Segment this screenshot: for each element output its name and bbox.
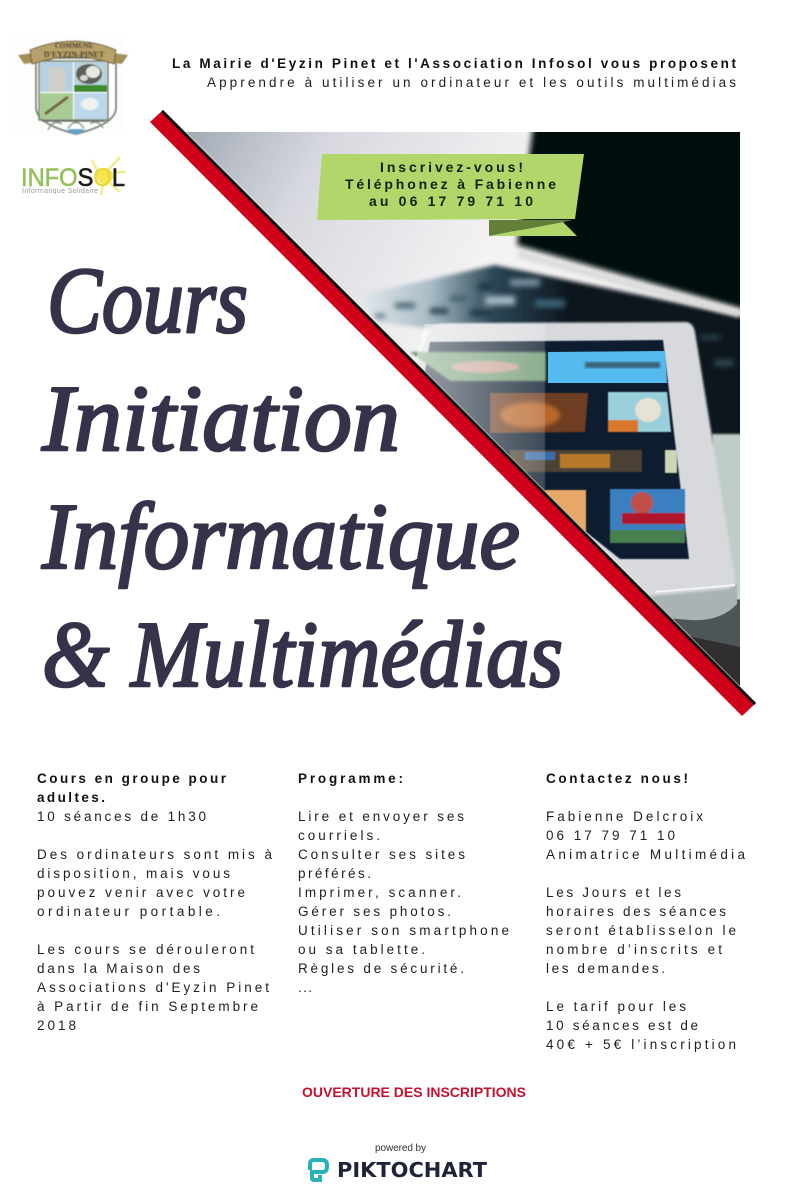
callout ribbon: Téléphonez à Fabienne [345,176,556,192]
column: cours [37,771,272,1033]
column: cours: disposition, mais vous [37,866,230,881]
laptop screen [512,132,740,312]
table [645,591,740,686]
tablet body underside [640,585,737,620]
column: contact: Contactez nous! [546,771,688,786]
title: & Multimédias [42,603,563,707]
column: programme: Consulter ses sites [298,847,465,862]
column: cours: Les cours se dérouleront [37,942,254,957]
column: cours: à Partir de fin Septembre [37,999,258,1014]
photo: laptop and tablet [186,120,770,695]
column: contact: Le tarif pour les [546,999,686,1014]
column: cours: Des ordinateurs sont mis à [37,847,272,862]
column: programme: Gérer ses photos. [298,904,451,919]
logo: commune d'Eyzin-Pinet crest [10,35,128,135]
piktochart branding: PIKTOCHART [337,1158,487,1182]
title [41,249,563,707]
header text: La Mairie d'Eyzin Pinet et l'Association Infosol vous proposent [172,56,736,71]
header text: Apprendre à utiliser un ordinateur et les outils multimédias [207,75,736,90]
laptop keyboard [355,265,770,445]
column: contact: les demandes. [546,961,665,976]
column: contact: 40€ + 5€ l’inscription [546,1037,736,1052]
column: contact: Les Jours et les [546,885,681,900]
column: programme: Imprimer, scanner. [298,885,461,900]
column: contact: horaires des séances [546,904,726,919]
keys [375,279,733,366]
title: Informatique [41,485,520,589]
column: cours: pouvez venir avec votre [37,885,245,900]
column: contact: 06 17 79 71 10 [546,828,675,843]
column: contact: nombre d’inscrits et [546,942,722,957]
tablet screen [420,340,689,559]
diagonal red band [150,110,756,716]
column: programme: préférés. [298,866,371,881]
column: programme: Utiliser son smartphone [298,923,509,938]
column: programme: Lire et envoyer ses [298,809,464,824]
column: programme: Programme: [298,771,403,786]
logo: commune d'Eyzin-Pinet crest: D'EYZIN-PINET [44,50,105,59]
registration notice: OUVERTURE DES INSCRIPTIONS [302,1084,526,1100]
column: programme: Règles de sécurité. [298,961,464,976]
column: contact: 10 séances est de [546,1018,698,1033]
title: Initiation [41,367,400,471]
column: cours: adultes. [37,790,105,805]
column: programme: ... [298,980,312,995]
callout ribbon: Inscrivez-vous! [380,159,523,175]
laptop body edge [518,254,740,314]
callout ribbon: au 06 17 79 71 10 [369,193,533,209]
logo: Infosol: Informatique Solidaire [22,188,98,195]
logo: commune d'Eyzin-Pinet crest: COMMUNE [55,42,94,50]
column: contact [546,771,745,1052]
column: cours: dans la Maison des [37,961,200,976]
column: contact: seront établisselon le [546,923,736,938]
column: programme [298,771,509,995]
screen reflection [416,324,546,491]
column: cours: Cours en groupe pour [37,771,227,786]
column: cours: ordinateur portable. [37,904,220,919]
column: cours: 2018 [37,1018,76,1033]
column: programme: courriels. [298,828,380,843]
thumbnails [410,352,546,381]
callout ribbon [317,154,584,236]
column: contact: Animatrice Multimédia [546,847,745,862]
title: Cours [47,249,248,353]
logo: Infosol: INFOSOL [21,164,125,192]
tablet frame [400,322,735,597]
piktochart branding: powered by [375,1143,426,1154]
mug [711,432,740,600]
piktochart branding [310,1143,487,1182]
column: programme: ou sa tablette. [298,942,425,957]
column: cours: Associations d'Eyzin Pinet [37,980,269,995]
column: contact: Fabienne Delcroix [546,809,703,824]
header text [172,56,736,90]
column: cours: 10 séances de 1h30 [37,809,206,824]
